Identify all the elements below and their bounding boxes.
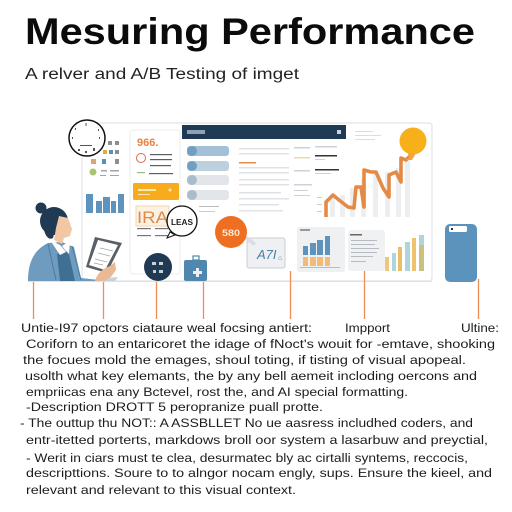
icon: dark circle xyxy=(144,253,172,281)
lower card: notes xyxy=(348,230,385,271)
body text: - The outtup thu NOT:: A ASSBLLET No ue aasress includhed coders, and xyxy=(20,416,473,430)
tablet xyxy=(86,237,122,273)
dark header xyxy=(182,125,346,139)
lower card: score: A7I xyxy=(256,247,277,262)
KPI card: 966. xyxy=(137,137,158,149)
body text: -Description DROTT 5 peropranize puall protte. xyxy=(26,400,323,414)
subtitle: A relver and A/B Testing of imget xyxy=(25,66,300,83)
body text: usolth what key elemants, the by any bell aemeit incloding oercons and xyxy=(25,369,477,383)
lower card: score: ⌂ xyxy=(278,255,282,262)
lower card: score xyxy=(247,238,285,268)
column labels: Impport xyxy=(345,323,391,335)
orange callout xyxy=(133,183,179,200)
body text xyxy=(20,337,495,497)
body text: empriicas ena any Bctevel, rost the, and AI special formatting. xyxy=(26,385,408,399)
hair xyxy=(36,202,46,214)
icon: orange bubble xyxy=(400,128,426,160)
speech bubble xyxy=(167,206,197,238)
colored bars xyxy=(385,235,424,271)
KPI card: IRA xyxy=(137,208,169,227)
lower card: bar chart xyxy=(297,227,345,272)
icon: phone xyxy=(445,224,477,282)
KPI card xyxy=(130,130,180,274)
body text: descripttions. Soure to to alngor nocam engly, sups. Ensure the kieel, and xyxy=(26,466,492,480)
body text: - Werit in ciars must te clea, desurmatec bly ac cirtalli syntems, reccocis, xyxy=(26,451,468,465)
orange badge: 580 xyxy=(222,228,240,238)
icon: clock xyxy=(69,120,105,156)
column labels: Untie-I97 opctors ciataure weal focsing antiert: xyxy=(21,323,312,335)
orange badge xyxy=(215,216,256,248)
body text: entr-itetted porterts, markdows broll oor system a lasarbuw and preyctial, xyxy=(26,433,488,447)
side details xyxy=(294,146,339,196)
icon: blue case xyxy=(184,256,207,281)
baseline xyxy=(28,281,432,282)
body text: the focues mold the emages, shoul toting, if tisting of visual apopeal. xyxy=(23,353,466,367)
body text: Coriforn to an entaricoret the idage of fNoct's wouit for -emtave, shooking xyxy=(26,337,495,351)
body text: relevant and relevant to this visual context. xyxy=(26,483,296,497)
line chart with orange line xyxy=(317,131,411,217)
dashboard panel xyxy=(82,123,432,281)
bar chart: blue xyxy=(86,194,124,213)
connector lines xyxy=(34,271,478,319)
list pills xyxy=(187,146,229,212)
face xyxy=(54,216,72,244)
column labels xyxy=(21,323,499,335)
column labels: Ultine: xyxy=(461,323,499,335)
sketch chart xyxy=(136,206,169,226)
small icon list xyxy=(90,141,119,176)
text table xyxy=(239,148,289,212)
jacket xyxy=(28,242,108,281)
speech bubble: LEAS xyxy=(171,217,193,227)
person with tablet xyxy=(28,202,122,281)
title: Mesuring Performance xyxy=(25,11,475,52)
